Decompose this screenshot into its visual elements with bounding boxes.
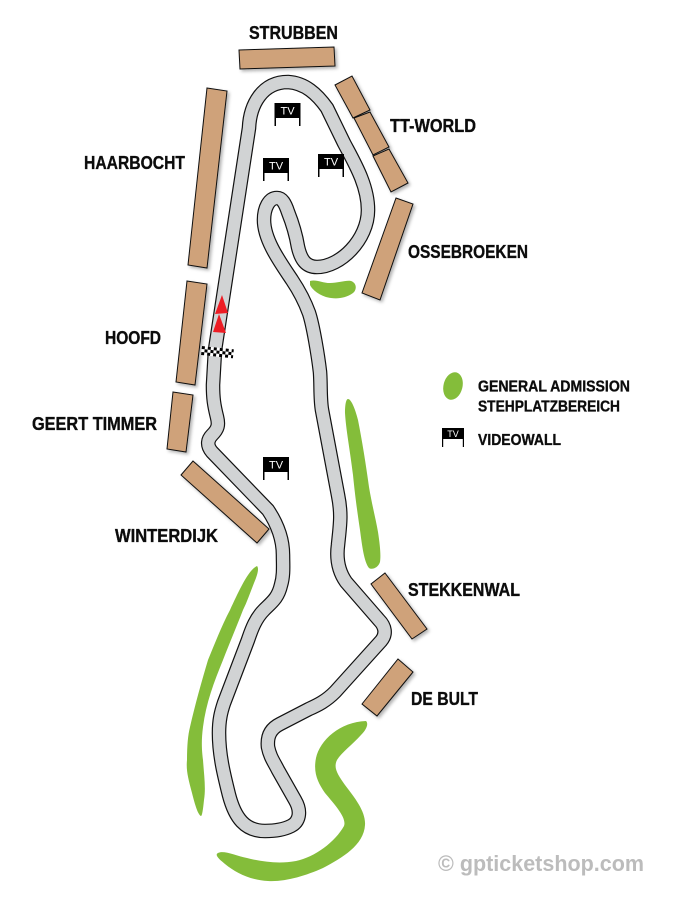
green area: Ossebroeken: [310, 280, 356, 298]
green area: De Bult south: [217, 721, 367, 881]
label: TT-World: TT-WORLD: [390, 116, 476, 136]
icon: videowall south: TV: [269, 460, 284, 472]
icon: videowall north: TV: [280, 106, 295, 118]
legend icon: videowall: [442, 428, 464, 447]
grandstand: Winterdijk: [181, 461, 269, 543]
icon: videowall centre: [263, 158, 289, 181]
label: Hoofd: HOOFD: [105, 328, 161, 348]
icon: red direction arrows: [213, 295, 228, 333]
grandstand: Hoofd: [176, 281, 207, 385]
grandstand: TT-World south: [373, 149, 408, 192]
legend text: stehplatzbereich: STEHPLATZBEREICH: [478, 398, 620, 416]
track outline: [208, 82, 385, 831]
legend: [440, 370, 630, 449]
label: Strubben: STRUBBEN: [249, 23, 338, 43]
green area: Winterdijk south: [187, 566, 258, 816]
icon: videowall centre: TV: [269, 160, 284, 172]
grandstand: Haarbocht: [188, 88, 227, 268]
grandstand: Strubben: [239, 47, 335, 69]
icon: chequered start-finish line: [201, 346, 234, 358]
race track: [208, 82, 385, 831]
icon: videowall east: TV: [324, 156, 339, 168]
legend icon: general admission: [440, 370, 466, 402]
grandstand: TT-World north: [335, 76, 370, 118]
label: Haarbocht: HAARBOCHT: [84, 153, 185, 173]
legend text: videowall: VIDEOWALL: [478, 432, 561, 449]
general admission areas: [187, 280, 380, 881]
icon: videowall east: [318, 154, 344, 177]
legend icon: videowall: TV: [447, 429, 459, 439]
grandstand: Geert Timmer: [167, 392, 193, 452]
icon: videowall north: [274, 103, 300, 126]
legend text: general admission: GENERAL ADMISSION: [478, 378, 630, 396]
grandstand: TT-World centre: [354, 112, 389, 155]
label: Geert Timmer: GEERT TIMMER: [32, 414, 157, 434]
grandstand: De Bult: [362, 659, 413, 716]
green area: Stekkenwal: [345, 399, 380, 569]
label: De Bult: DE BULT: [411, 689, 478, 709]
grandstands: [167, 47, 427, 716]
grandstand: Ossebroeken: [362, 198, 413, 300]
grandstand: Stekkenwal: [371, 573, 427, 639]
icon: videowall south: [263, 457, 289, 480]
track surface: [208, 82, 385, 831]
watermark: © gpticketshop.com: [438, 851, 644, 876]
label: Winterdijk: WINTERDIJK: [115, 526, 218, 546]
label: Stekkenwal: STEKKENWAL: [408, 580, 520, 600]
label: Ossebroeken: OSSEBROEKEN: [408, 242, 528, 262]
